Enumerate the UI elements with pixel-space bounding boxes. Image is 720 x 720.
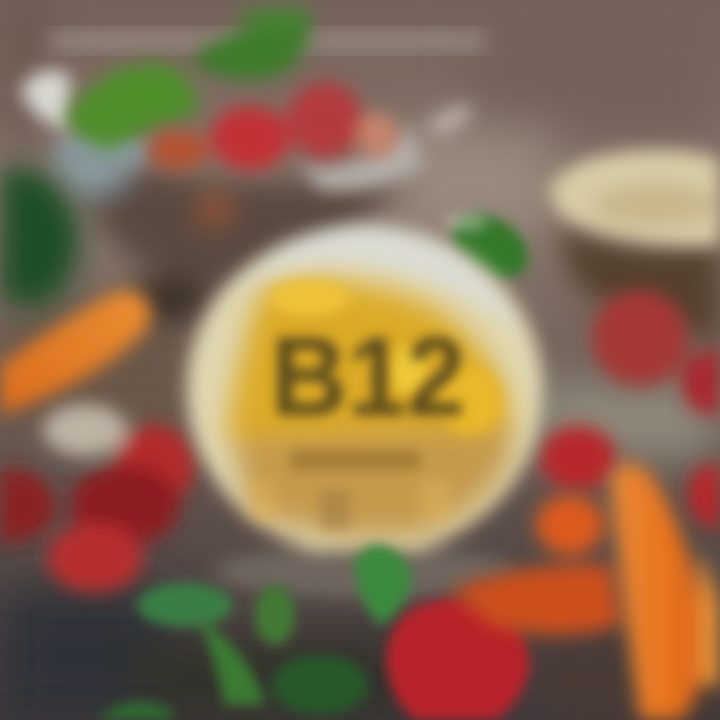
bowl body (52, 146, 400, 324)
jar lower stripe (250, 450, 450, 530)
tomatoes, right (540, 290, 720, 530)
jar body (187, 224, 543, 598)
bowl, top right (548, 150, 720, 340)
carrot, left (0, 290, 151, 415)
bowl tomatoes (148, 82, 398, 170)
bowl of salad, top left (20, 7, 476, 324)
tomato, bottom centre right (386, 598, 530, 720)
basil leaf, centre right (440, 200, 540, 292)
tomatoes, lower left (0, 404, 195, 592)
green pepper, left (0, 167, 79, 306)
bowl rim (20, 70, 476, 191)
B12 label: B12 (270, 314, 466, 439)
jar yellow filling (225, 281, 515, 537)
herbs, bottom centre (97, 545, 412, 720)
bowl greens (65, 7, 311, 150)
glass jar with B12 label (187, 224, 543, 598)
faint text banner (50, 30, 485, 52)
carrots, bottom right (450, 462, 720, 720)
